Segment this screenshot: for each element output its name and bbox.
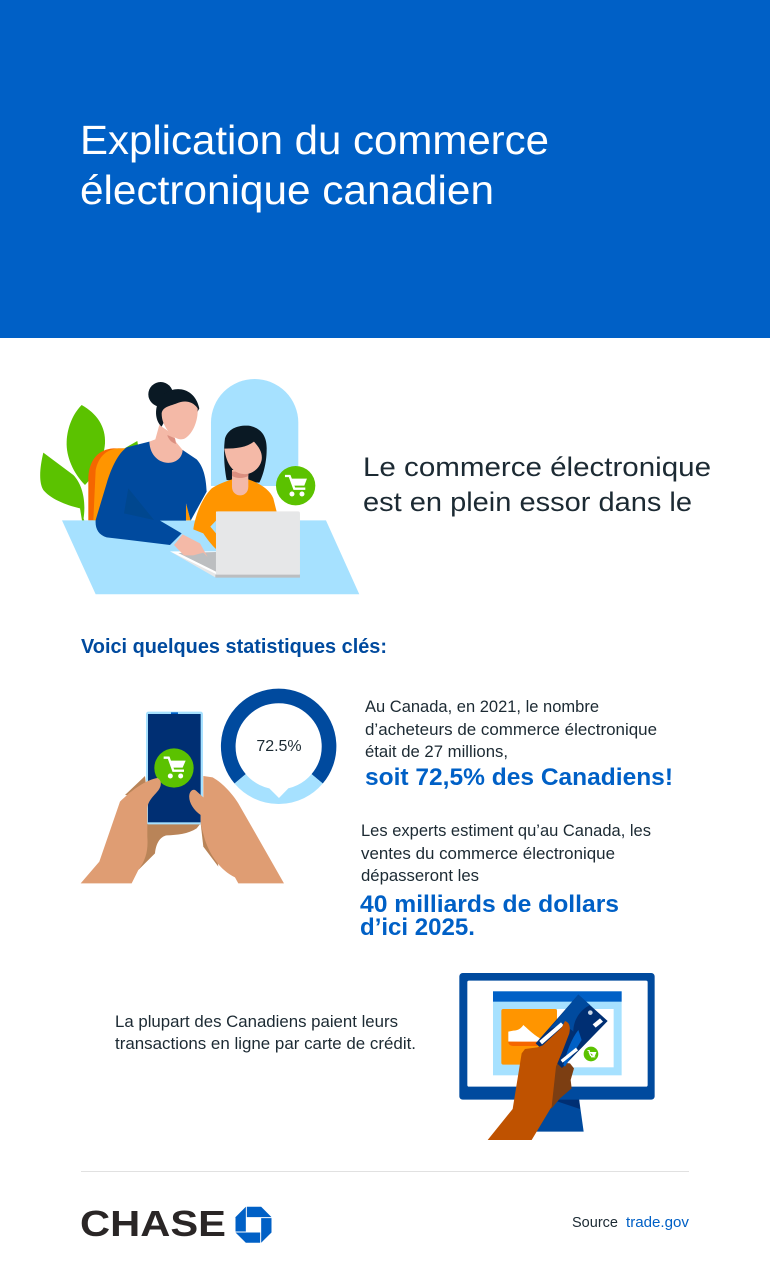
stat 1 text: Au Canada, en 2021, le nombre — [365, 698, 599, 716]
stat 1 text: était de 27 millions, — [365, 743, 508, 761]
illustration: phone and donut chart — [81, 696, 329, 883]
title: Explication du commerce — [80, 117, 549, 163]
stat 2 text: ventes du commerce électronique — [361, 845, 615, 863]
stat 3 text: transactions en ligne par carte de crédit. — [115, 1035, 416, 1053]
stat 3 text: La plupart des Canadiens paient leurs — [115, 1013, 398, 1031]
icon: cart badge — [154, 748, 194, 788]
monitor stand — [527, 1098, 584, 1132]
stat 1 text — [365, 698, 673, 791]
hand — [488, 1021, 570, 1140]
stat 2 text: dépasseront les — [361, 867, 479, 885]
source line: trade.gov — [626, 1215, 690, 1231]
product tile with shoe — [501, 1009, 557, 1065]
stat 1 text: d’acheteurs de commerce électronique — [365, 721, 657, 739]
arch window — [211, 379, 298, 486]
table — [62, 520, 359, 594]
laptop — [170, 511, 300, 578]
stat 2 highlight — [360, 891, 619, 941]
monitor — [459, 973, 655, 1100]
right hand — [189, 776, 284, 883]
source line: Source — [572, 1215, 618, 1231]
logo wordmark: CHASE — [80, 1203, 226, 1244]
chair — [88, 448, 130, 520]
source line — [572, 1215, 690, 1231]
back of hand — [125, 776, 201, 870]
title — [80, 117, 549, 213]
browser window — [493, 991, 622, 1075]
section heading: Voici quelques statistiques clés: — [81, 636, 387, 658]
seated woman — [186, 426, 277, 549]
title: électronique canadien — [80, 167, 494, 213]
divider — [81, 1171, 689, 1172]
standing woman — [96, 382, 207, 545]
logo octagon — [236, 1207, 271, 1243]
icon: shopping cart badge — [276, 466, 315, 505]
illustration: two people shopping on a laptop — [40, 379, 359, 594]
back of hand — [540, 1062, 574, 1108]
stat 2 text: Les experts estiment qu’au Canada, les — [361, 822, 651, 840]
illustration: credit card payment on monitor — [459, 973, 655, 1140]
donut chart 72.5% — [228, 696, 329, 798]
icon: cart badge — [584, 1047, 598, 1061]
logo: Chase — [80, 1203, 271, 1244]
intro text: Le commerce électronique — [363, 452, 711, 482]
donut value: 72.5% — [256, 738, 302, 755]
intro text: est en plein essor dans le — [363, 487, 692, 517]
credit card — [536, 995, 608, 1068]
stat 3 text — [115, 1013, 416, 1053]
stat 1 highlight: soit 72,5% des Canadiens! — [365, 764, 673, 791]
left hand — [81, 778, 161, 883]
stat 2 highlight: d’ici 2025. — [360, 914, 475, 941]
header banner — [0, 0, 770, 338]
right hand shadow — [201, 823, 218, 867]
phone — [146, 712, 203, 824]
intro text — [363, 452, 711, 517]
plant — [40, 405, 138, 521]
stat 2 highlight: 40 milliards de dollars — [360, 891, 619, 918]
stat 2 text — [360, 822, 651, 941]
